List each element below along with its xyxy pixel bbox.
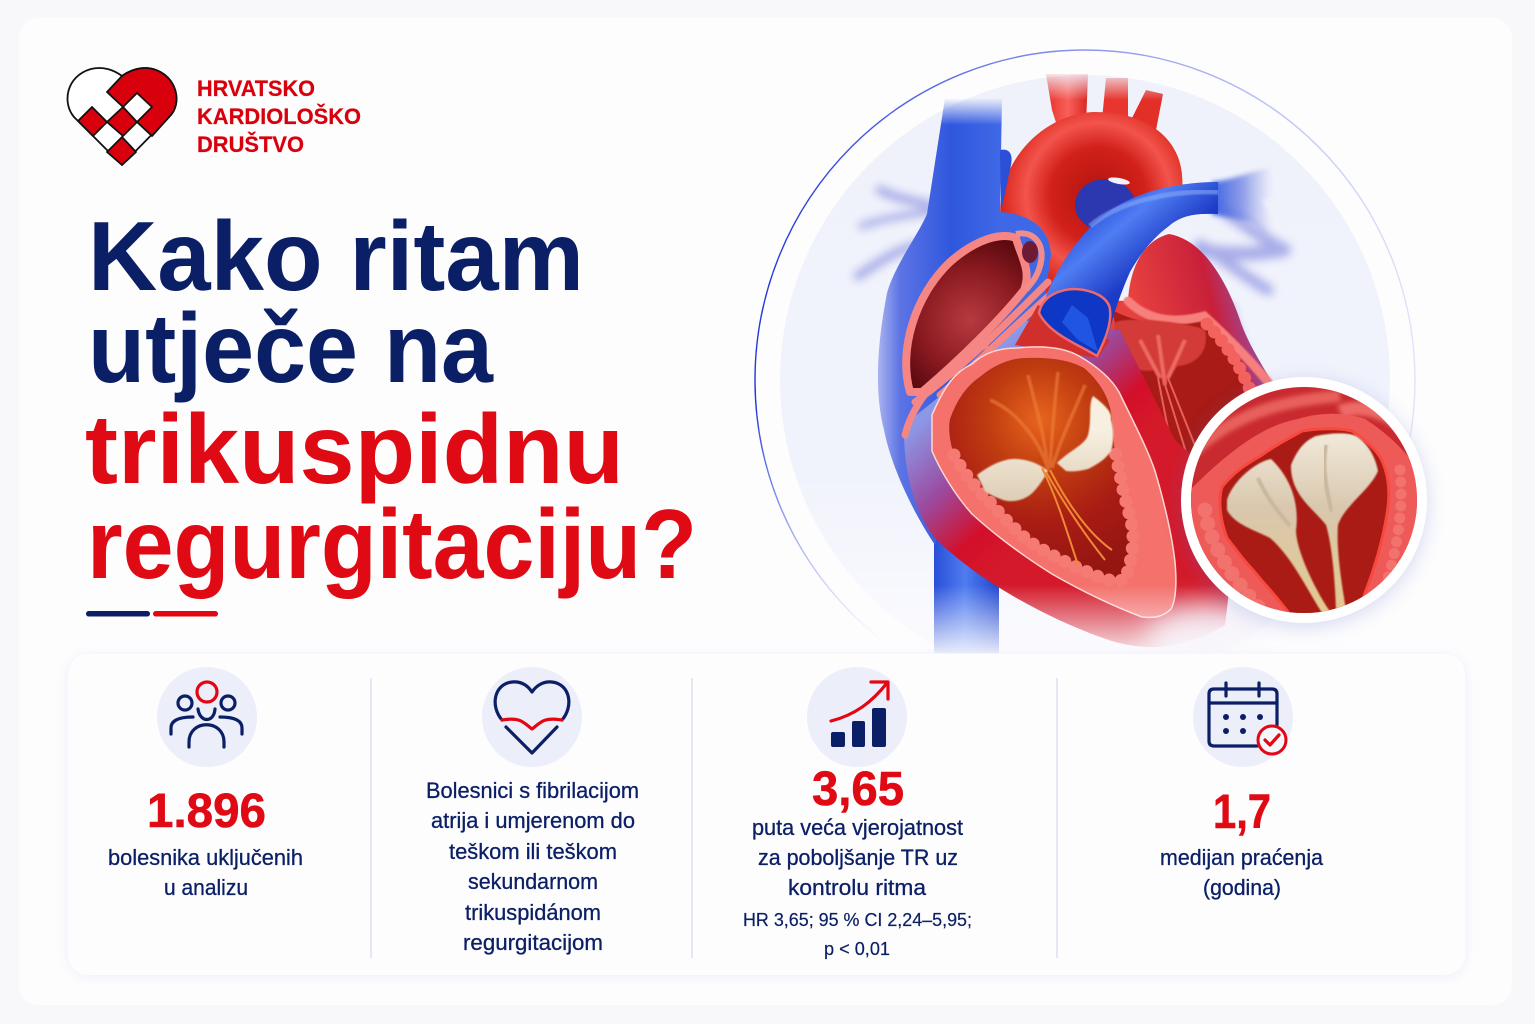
statistics note — [743, 909, 972, 959]
stat: population — [426, 667, 639, 955]
inset leaflet left — [1227, 459, 1331, 613]
lower heart body — [904, 320, 1240, 647]
number: 1,7 — [1213, 786, 1271, 839]
aorta branches — [1046, 74, 1163, 135]
veins: pulmonary branches — [858, 190, 1285, 355]
inset leaflet right — [1291, 433, 1378, 610]
logo text: DRUŠTVO — [197, 132, 304, 157]
logo: Hrvatsko kardiološko društvo — [67, 68, 361, 165]
body bottom-right fade — [1133, 584, 1228, 647]
icon: woven heart — [67, 68, 177, 165]
stat: follow-up — [1160, 667, 1324, 900]
back chamber — [1110, 234, 1274, 454]
description: teškom ili teškom — [449, 839, 617, 864]
right atrium cavity — [906, 236, 1027, 392]
wall scallops — [954, 451, 1133, 581]
title: Kako ritam — [88, 201, 584, 311]
illustration: heart cross-section — [858, 74, 1285, 674]
description: za poboljšanje TR uz — [758, 845, 958, 870]
icon: calendar — [1193, 667, 1293, 767]
septum — [905, 282, 1050, 435]
description — [426, 778, 639, 955]
valve leaflet right — [1057, 396, 1113, 471]
atrial valve ring — [1016, 233, 1042, 290]
inset upper fold — [1195, 396, 1340, 450]
right ventricle cavity — [949, 358, 1133, 581]
chordae — [1042, 468, 1112, 565]
icon: people — [157, 667, 257, 767]
description: u analizu — [164, 875, 248, 900]
description — [1160, 845, 1324, 900]
description: Bolesnici s fibrilacijom — [426, 778, 639, 803]
description — [108, 845, 303, 900]
number: 3,65 — [812, 763, 904, 816]
description: regurgitacijom — [463, 930, 603, 955]
title: utječe na — [88, 293, 494, 403]
statistics note: p < 0,01 — [824, 938, 890, 959]
logo text: KARDIOLOŠKO — [197, 104, 361, 129]
aortic arch hole — [1075, 179, 1135, 231]
logo text — [197, 76, 361, 157]
inset chamber — [1220, 429, 1389, 620]
title: regurgitaciju? — [87, 489, 697, 599]
description: kontrolu ritma — [788, 875, 927, 900]
stats panel — [68, 654, 1465, 976]
inferior vena cava — [934, 539, 999, 653]
description: puta veća vjerojatnost — [752, 815, 963, 840]
logo text: HRVATSKO — [197, 76, 315, 101]
stat: hazard ratio — [743, 667, 972, 959]
icon: heart — [482, 667, 582, 767]
icon: rising bars — [807, 667, 907, 767]
title — [85, 201, 697, 599]
description: bolesnika uključenih — [108, 845, 303, 870]
number: 1.896 — [147, 785, 266, 838]
inset wall scallops — [1198, 502, 1266, 606]
right ventricle wall — [932, 347, 1176, 617]
background disc behind heart — [754, 49, 1416, 630]
stat: patients — [108, 667, 303, 900]
description: medijan praćenja — [1160, 845, 1324, 870]
title: trikuspidnu — [85, 394, 624, 504]
description: sekundarnom — [468, 869, 598, 894]
description: (godina) — [1203, 875, 1281, 900]
statistics note: HR 3,65; 95 % CI 2,24–5,95; — [743, 909, 972, 930]
description — [752, 815, 963, 900]
aortic arch — [1000, 112, 1182, 295]
pulmonary valve opening — [1039, 289, 1110, 356]
superior vena cava and right atrium — [878, 98, 1051, 545]
inset pink wall — [1190, 414, 1425, 620]
ventricle fan streaks — [990, 372, 1085, 470]
title underline accent — [86, 611, 218, 616]
pulmonary artery — [1046, 182, 1218, 356]
inset: valve close-up — [1180, 377, 1430, 630]
description: trikuspidánom — [465, 900, 601, 925]
back chamber valve — [1114, 320, 1206, 385]
valve leaflet left — [977, 459, 1048, 501]
description: atrija i umjerenom do — [431, 808, 635, 833]
pulmonary artery end fan — [1208, 168, 1269, 232]
